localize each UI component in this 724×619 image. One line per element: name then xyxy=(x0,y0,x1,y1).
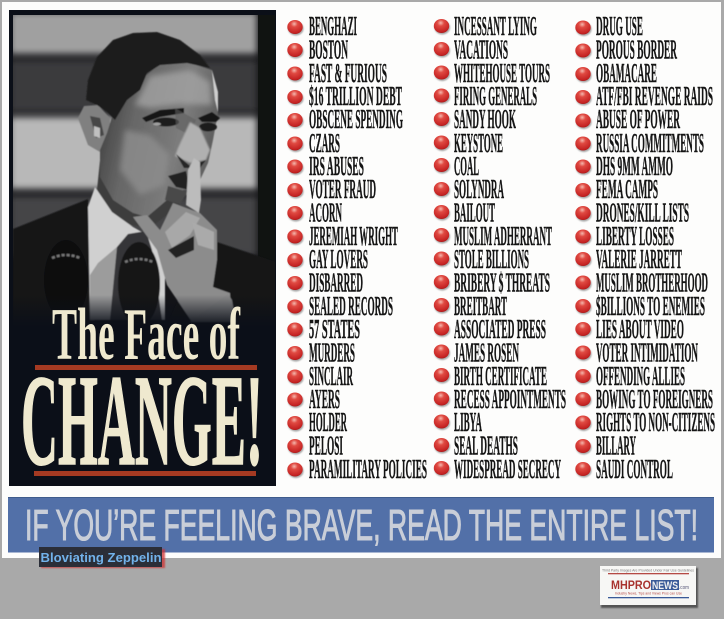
microphone right xyxy=(118,242,160,326)
panel: list column 2: KEYSTONE xyxy=(454,128,503,158)
item xyxy=(287,104,403,134)
item xyxy=(434,407,482,437)
text: BRIBERY $ THREATS xyxy=(454,268,550,298)
shirt xyxy=(88,187,165,320)
logo wordmark MHPRO: MHPRO xyxy=(611,578,651,592)
panel: list column 1: IRS ABUSES xyxy=(309,151,364,181)
banner xyxy=(8,497,714,552)
text: INCESSANT LYING xyxy=(454,11,537,41)
item xyxy=(434,104,516,134)
item xyxy=(287,11,357,41)
item xyxy=(434,198,495,228)
shadow between fingers xyxy=(168,236,194,258)
panel: list column 1: 57 STATES xyxy=(309,314,360,344)
item xyxy=(575,58,657,88)
item xyxy=(575,338,698,368)
item xyxy=(434,174,504,204)
item xyxy=(287,81,402,111)
item xyxy=(287,174,376,204)
logo: MHProNews xyxy=(600,566,698,608)
panel: poster xyxy=(9,10,276,493)
text: SEALED RECORDS xyxy=(309,291,393,321)
item xyxy=(287,454,427,484)
panel: list column 1: BOSTON xyxy=(309,34,348,64)
panel: list column 2: COAL xyxy=(454,151,479,181)
text: CHANGE! xyxy=(21,349,263,493)
item xyxy=(434,454,561,484)
microphone left xyxy=(44,240,88,298)
face xyxy=(100,62,218,217)
item xyxy=(287,198,342,228)
panel: list column 2: JAMES ROSEN xyxy=(454,338,519,368)
panel: list column 1: VOTER FRAUD xyxy=(309,174,376,204)
hand xyxy=(133,203,232,322)
item xyxy=(575,244,682,274)
logo .com: .com xyxy=(679,585,689,591)
author tag: Bloviating Zeppelin: Bloviating Zeppelin xyxy=(40,550,162,565)
panel: list column 2: LIBYA xyxy=(454,407,482,437)
item xyxy=(434,11,537,41)
text: PARAMILITARY POLICIES xyxy=(309,454,427,484)
item xyxy=(434,244,529,274)
mouth xyxy=(168,171,190,190)
cheek highlight xyxy=(120,130,170,195)
panel: list column 1: BENGHAZI xyxy=(309,11,357,41)
item xyxy=(287,221,398,251)
item xyxy=(287,58,387,88)
item xyxy=(575,151,673,181)
suit xyxy=(13,198,90,316)
title: The Face of: The Face of xyxy=(52,294,241,376)
item xyxy=(434,314,546,344)
item xyxy=(575,361,685,391)
item xyxy=(434,338,519,368)
panel: list column 1: DISBARRED xyxy=(309,268,363,298)
forehead highlight xyxy=(135,70,212,108)
logo wordmark NEWS: NEWS xyxy=(652,580,678,592)
panel: list column 1: HOLDER xyxy=(309,407,347,437)
panel: list column 1: AYERS xyxy=(309,384,340,414)
item xyxy=(575,104,680,134)
panel: list column 1: PELOSI xyxy=(309,430,343,460)
item xyxy=(287,151,364,181)
item xyxy=(287,291,393,321)
panel: list column 1: MURDERS xyxy=(309,338,355,368)
hair edge xyxy=(212,70,218,112)
text: $16 TRILLION DEBT xyxy=(309,81,402,111)
item xyxy=(434,268,550,298)
panel: list column 1: SINCLAIR xyxy=(309,361,353,391)
panel: list column 3 xyxy=(575,11,715,484)
nose xyxy=(175,122,210,163)
panel: list column 1: CZARS xyxy=(309,128,340,158)
red rule top xyxy=(35,365,257,370)
neck xyxy=(96,161,172,226)
item xyxy=(287,384,340,414)
author tag: Bloviating Zeppelin xyxy=(39,547,165,568)
eyes xyxy=(153,118,179,126)
panel: list column 1 xyxy=(287,11,427,484)
item xyxy=(287,314,360,344)
text: STOLE BILLIONS xyxy=(454,244,529,274)
item xyxy=(575,34,677,64)
item xyxy=(575,221,674,251)
poster background xyxy=(9,10,276,486)
text: FIRING GENERALS xyxy=(454,81,537,111)
item xyxy=(434,221,552,251)
item xyxy=(434,430,518,460)
panel: list column 2: BAILOUT xyxy=(454,198,495,228)
item xyxy=(434,291,507,321)
panel: list column 2 xyxy=(434,11,566,484)
panel: list column 2: SANDY HOOK xyxy=(454,104,516,134)
item xyxy=(575,174,658,204)
logo fine print: Third Party Images Are Provided Under Fair Use Guidelines xyxy=(602,568,694,572)
panel: list column 2: SOLYNDRA xyxy=(454,174,504,204)
item xyxy=(434,58,550,88)
item xyxy=(575,11,643,41)
item xyxy=(287,430,343,460)
eyebrows xyxy=(142,108,184,122)
eye socket shade xyxy=(174,108,196,132)
item xyxy=(287,407,347,437)
fade photo into poster xyxy=(13,295,275,327)
tie xyxy=(110,231,162,320)
item xyxy=(287,268,363,298)
panel: list column 2: SEAL DEATHS xyxy=(454,430,518,460)
text: OBSCENE SPENDING xyxy=(309,104,403,134)
text: ASSOCIATED PRESS xyxy=(454,314,546,344)
item xyxy=(287,34,348,64)
item xyxy=(575,314,684,344)
item xyxy=(287,244,368,274)
item xyxy=(575,430,636,460)
cuff xyxy=(230,297,236,321)
ear xyxy=(78,105,110,152)
panel: list column 2: BREITBART xyxy=(454,291,507,321)
item xyxy=(287,361,353,391)
panel: list column 1: ACORN xyxy=(309,198,342,228)
item xyxy=(434,361,547,391)
item xyxy=(434,384,566,414)
item xyxy=(575,198,689,228)
item xyxy=(287,338,355,368)
photo: portrait with finger to lips xyxy=(10,12,276,330)
panel: list column 3: BILLARY xyxy=(596,430,636,460)
index finger xyxy=(186,158,201,213)
panel: list column 1: GAY LOVERS xyxy=(309,244,368,274)
item xyxy=(434,81,537,111)
item xyxy=(434,151,479,181)
red rule bottom xyxy=(34,471,256,476)
logo tagline: Industry News, Tips and Views Pros can Use xyxy=(615,592,682,596)
panel: list column 1: FAST & FURIOUS xyxy=(309,58,387,88)
item xyxy=(575,454,673,484)
item xyxy=(287,128,340,158)
text: JEREMIAH WRIGHT xyxy=(309,221,398,251)
item xyxy=(434,34,508,64)
hair xyxy=(86,32,210,120)
text: BIRTH CERTIFICATE xyxy=(454,361,547,391)
item xyxy=(434,128,503,158)
panel: list column 2: VACATIONS xyxy=(454,34,508,64)
